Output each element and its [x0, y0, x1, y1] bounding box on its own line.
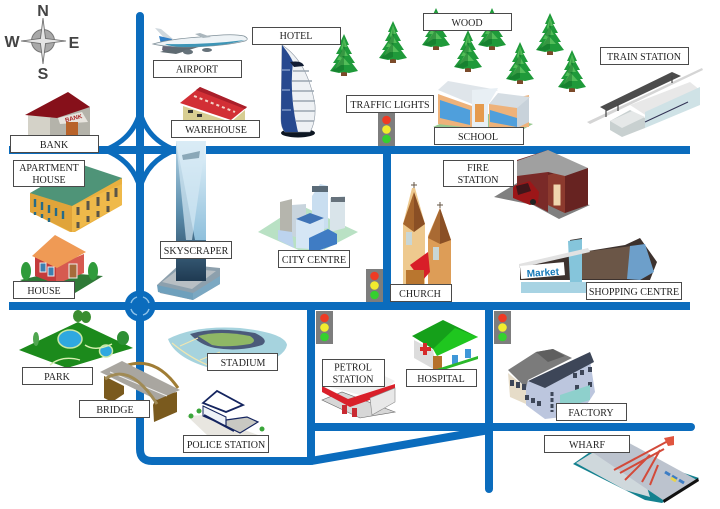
label: fire station: STATION — [458, 175, 498, 186]
label: stadium — [208, 354, 278, 370]
label: skyscraper: SKYSCRAPER — [164, 246, 229, 257]
label: petrol station: STATION — [333, 374, 373, 386]
label: shopping centre — [586, 282, 682, 300]
icon: airplane — [153, 28, 247, 54]
label: warehouse — [172, 120, 260, 138]
label: fire station: FIRE — [467, 163, 489, 174]
label: airport: AIRPORT — [176, 64, 218, 76]
icon: house — [20, 235, 103, 293]
icon: skyscraper — [157, 141, 220, 300]
icon: apartment house — [30, 165, 122, 232]
label: church — [390, 284, 452, 302]
icon: compass — [4, 3, 80, 83]
label: airport — [154, 60, 242, 78]
icon: bridge — [100, 361, 180, 422]
label: fire station — [444, 160, 514, 186]
label: shopping centre: SHOPPING CENTRE — [589, 287, 679, 298]
icon: shopping centre — [519, 238, 657, 293]
label: church: CHURCH — [399, 289, 441, 300]
icon: trees — [330, 8, 586, 92]
label: house: HOUSE — [27, 286, 61, 297]
icon: traffic lights — [316, 113, 511, 344]
label: park: PARK — [44, 372, 71, 383]
label: traffic lights — [346, 96, 434, 112]
icon: police station — [187, 391, 264, 438]
label: petrol station: PETROL — [334, 362, 372, 374]
icon: bank — [25, 92, 90, 136]
icon: park — [19, 310, 133, 368]
label: skyscraper — [160, 242, 232, 258]
icon: bank: BANK — [65, 114, 84, 124]
icon: church — [403, 182, 451, 284]
label: hotel: HOTEL — [280, 31, 312, 42]
label: warehouse: WAREHOUSE — [185, 125, 247, 136]
label: city centre — [278, 250, 350, 268]
icon: compass: W — [4, 34, 20, 51]
icon: school — [433, 81, 533, 130]
label: train station: TRAIN STATION — [607, 52, 681, 63]
label: wharf: WHARF — [569, 440, 605, 451]
label: hospital — [406, 370, 476, 386]
label: bank: BANK — [40, 140, 69, 151]
icon: wharf — [573, 436, 699, 503]
label: hospital: HOSPITAL — [417, 374, 465, 385]
label: wood — [424, 14, 512, 30]
label: stadium: STADIUM — [221, 358, 265, 369]
icon: compass: S — [38, 66, 49, 83]
label: factory — [556, 404, 626, 420]
label: bridge — [80, 400, 150, 418]
icon: compass: N — [37, 3, 49, 20]
label: traffic lights: TRAFFIC LIGHTS — [350, 100, 430, 111]
icon: shopping centre: Market — [526, 267, 560, 280]
icon: hotel tower — [281, 45, 315, 138]
label: bridge: BRIDGE — [96, 405, 134, 416]
icon: hospital — [412, 320, 478, 372]
label: police station — [184, 436, 268, 452]
label: school: SCHOOL — [458, 132, 498, 143]
label: hotel — [252, 28, 340, 44]
label: school — [434, 128, 524, 144]
label: city centre: CITY CENTRE — [282, 255, 346, 266]
label: park — [22, 368, 92, 384]
label: apartment house: HOUSE — [32, 175, 66, 186]
icon: fire station — [494, 150, 590, 219]
label: factory: FACTORY — [568, 408, 614, 419]
label: police station: POLICE STATION — [187, 440, 265, 451]
icon: stadium — [168, 327, 287, 368]
icon: compass: E — [69, 35, 80, 52]
label: house — [14, 282, 74, 298]
label: petrol station — [322, 360, 384, 386]
label: bank — [10, 136, 98, 152]
label: apartment house: APARTMENT — [19, 163, 79, 174]
icon: train station — [587, 68, 703, 137]
icon: city centre — [258, 184, 358, 256]
label: train station — [600, 48, 688, 64]
icon: factory — [508, 349, 595, 419]
label: apartment house — [14, 160, 84, 186]
label: wood: WOOD — [451, 18, 483, 29]
label: wharf — [544, 436, 630, 452]
icon: warehouse — [180, 87, 247, 122]
icon: petrol station — [322, 364, 395, 418]
